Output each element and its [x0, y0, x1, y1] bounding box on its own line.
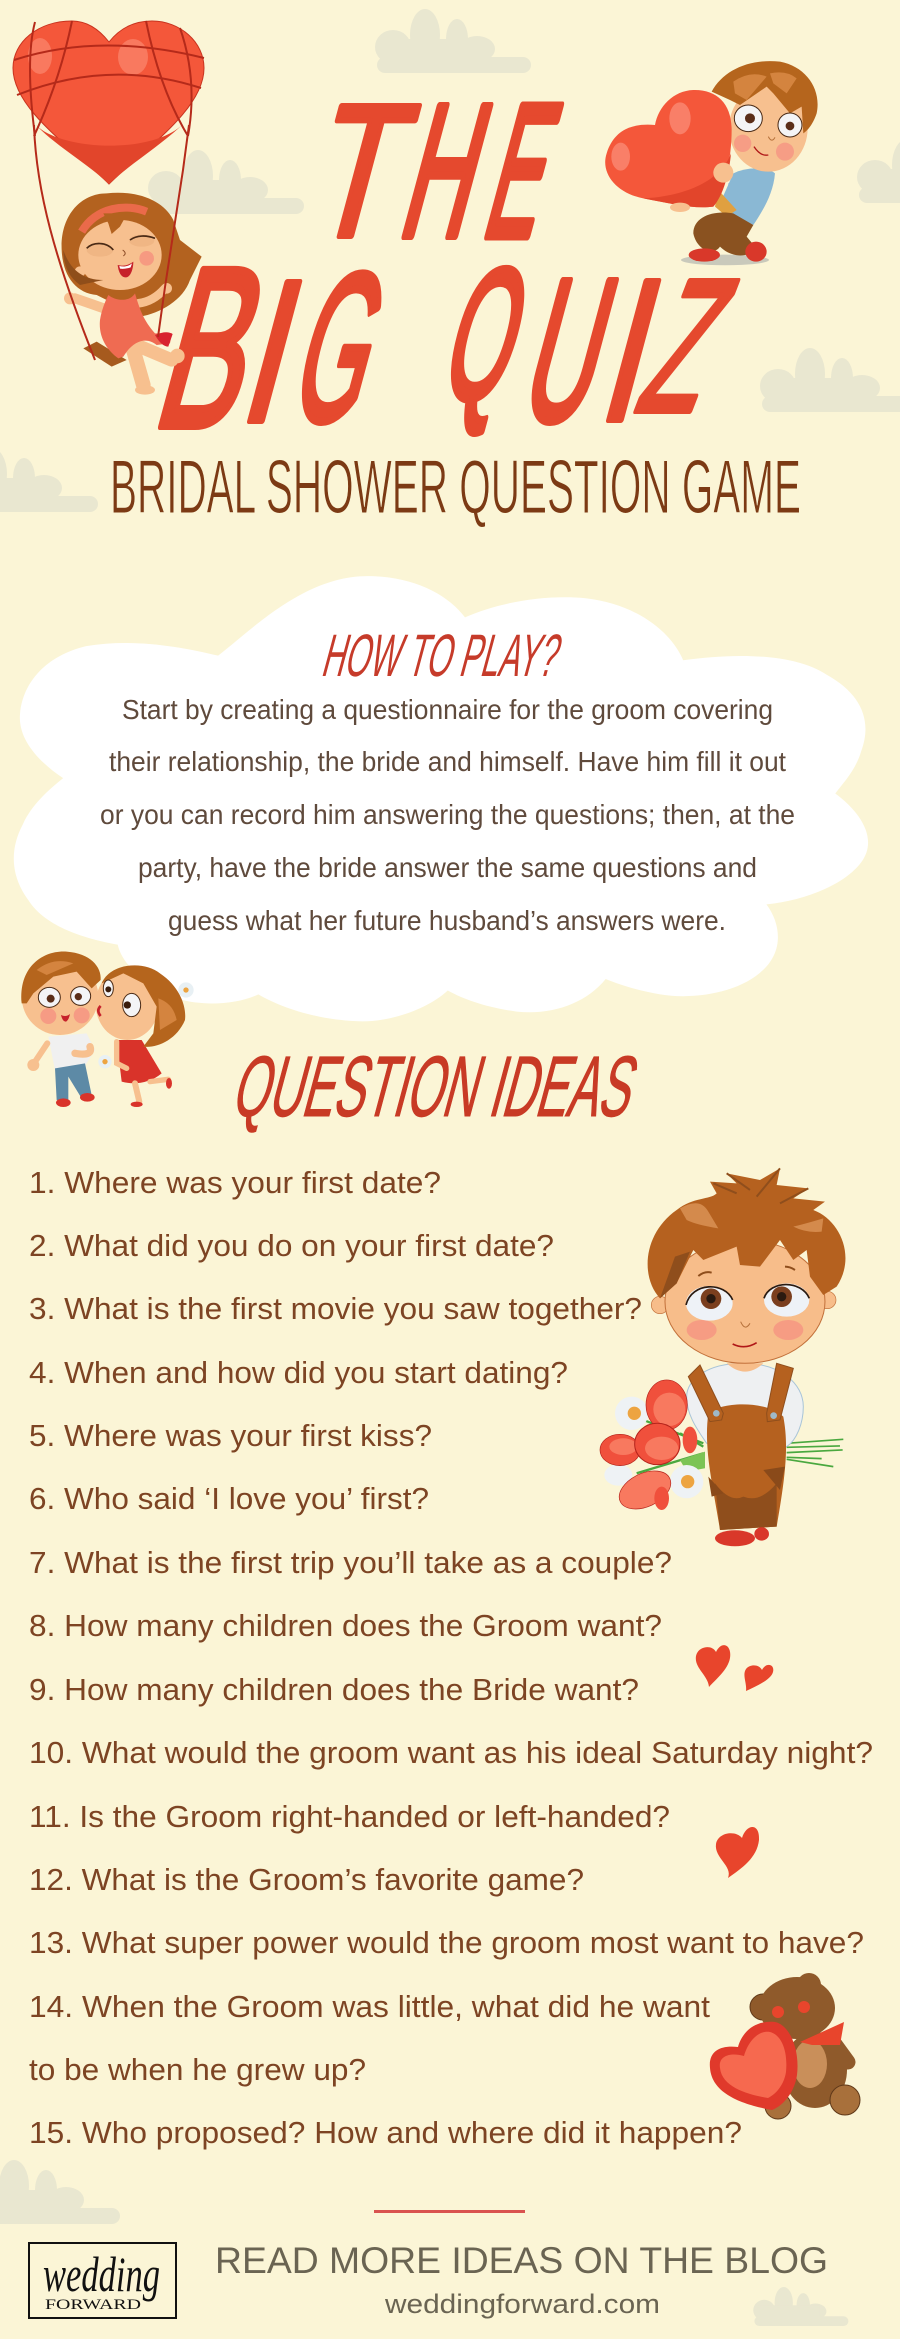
- list: 15 questions: 15. Who proposed? How and where did it happen?: [29, 2115, 742, 2150]
- panel: how to play cloud: [14, 576, 868, 1021]
- title: The Big Quiz: Z: [616, 241, 759, 452]
- list: 15 questions: 10. What would the groom want as his ideal Saturday night?: [29, 1735, 873, 1770]
- illustration: boy with flowers: [600, 1168, 845, 1546]
- logo: Wedding Forward: wedding: [43, 2246, 160, 2302]
- heading: how to play: HOW TO PLAY?: [317, 622, 568, 689]
- illustration: boy hugging big heart: [605, 61, 818, 265]
- website url: weddingforward.com: [384, 2289, 660, 2319]
- text: how to play instructions: guess what her future husband’s answers were.: [168, 905, 726, 936]
- illustration: kissing kids: [21, 952, 194, 1107]
- text: how to play instructions: their relationship, the bride and himself. Have him fill it out: [109, 746, 786, 777]
- illustration: girl on swing: [62, 193, 202, 395]
- list: 15 questions: 5. Where was your first kiss?: [29, 1418, 432, 1453]
- list: 15 questions: to be when he grew up?: [29, 2052, 366, 2087]
- list: 15 questions: 11. Is the Groom right-handed or left-handed?: [29, 1799, 670, 1834]
- title: The Big Quiz: B: [137, 221, 290, 474]
- title: The Big Quiz: E: [469, 65, 578, 276]
- title: The Big Quiz: H: [385, 65, 510, 276]
- illustration: teddy bear with heart: [710, 1973, 860, 2119]
- icon: small hearts: [696, 1645, 773, 1878]
- list: 15 questions: 13. What super power would the groom most want to have?: [29, 1925, 864, 1960]
- list: 15 questions: 1. Where was your first date?: [29, 1165, 441, 1200]
- title: The Big Quiz: I: [224, 238, 325, 464]
- logo: Wedding Forward: FORWARD: [45, 2297, 141, 2313]
- list: 15 questions: 12. What is the Groom’s favorite game?: [29, 1862, 584, 1897]
- title: The Big Quiz: [137, 65, 759, 474]
- icon: heart balloon: [13, 21, 204, 184]
- title: The Big Quiz: I: [583, 237, 684, 463]
- list: 15 questions: 7. What is the first trip you’ll take as a couple?: [29, 1545, 672, 1580]
- logo: Wedding Forward: [29, 2243, 176, 2318]
- list: 15 questions: 14. When the Groom was little, what did he want: [29, 1989, 710, 2024]
- title: The Big Quiz: U: [505, 237, 636, 463]
- title: The Big Quiz: Q: [427, 231, 548, 437]
- title: The Big Quiz: G: [275, 231, 408, 465]
- list: 15 questions: 2. What did you do on your first date?: [29, 1228, 554, 1263]
- text: how to play instructions: Start by creating a questionnaire for the groom covering: [122, 694, 773, 725]
- list: 15 questions: [29, 1165, 873, 2150]
- text: how to play instructions: party, have the bride answer the same questions and: [138, 852, 757, 883]
- title: The Big Quiz: T: [292, 65, 434, 276]
- list: 15 questions: 6. Who said ‘I love you’ first?: [29, 1481, 429, 1516]
- text: how to play instructions: or you can record him answering the questions; then, at the: [100, 799, 795, 830]
- divider rule: [374, 2210, 525, 2213]
- list: 15 questions: 9. How many children does the Bride want?: [29, 1672, 639, 1707]
- list: 15 questions: 8. How many children does the Groom want?: [29, 1608, 662, 1643]
- swing ropes: [34, 125, 189, 360]
- call to action: READ MORE IDEAS ON THE BLOG: [215, 2240, 828, 2281]
- list: 15 questions: 4. When and how did you start dating?: [29, 1355, 568, 1390]
- list: 15 questions: 3. What is the first movie you saw together?: [29, 1291, 642, 1326]
- text: how to play instructions: [100, 694, 795, 936]
